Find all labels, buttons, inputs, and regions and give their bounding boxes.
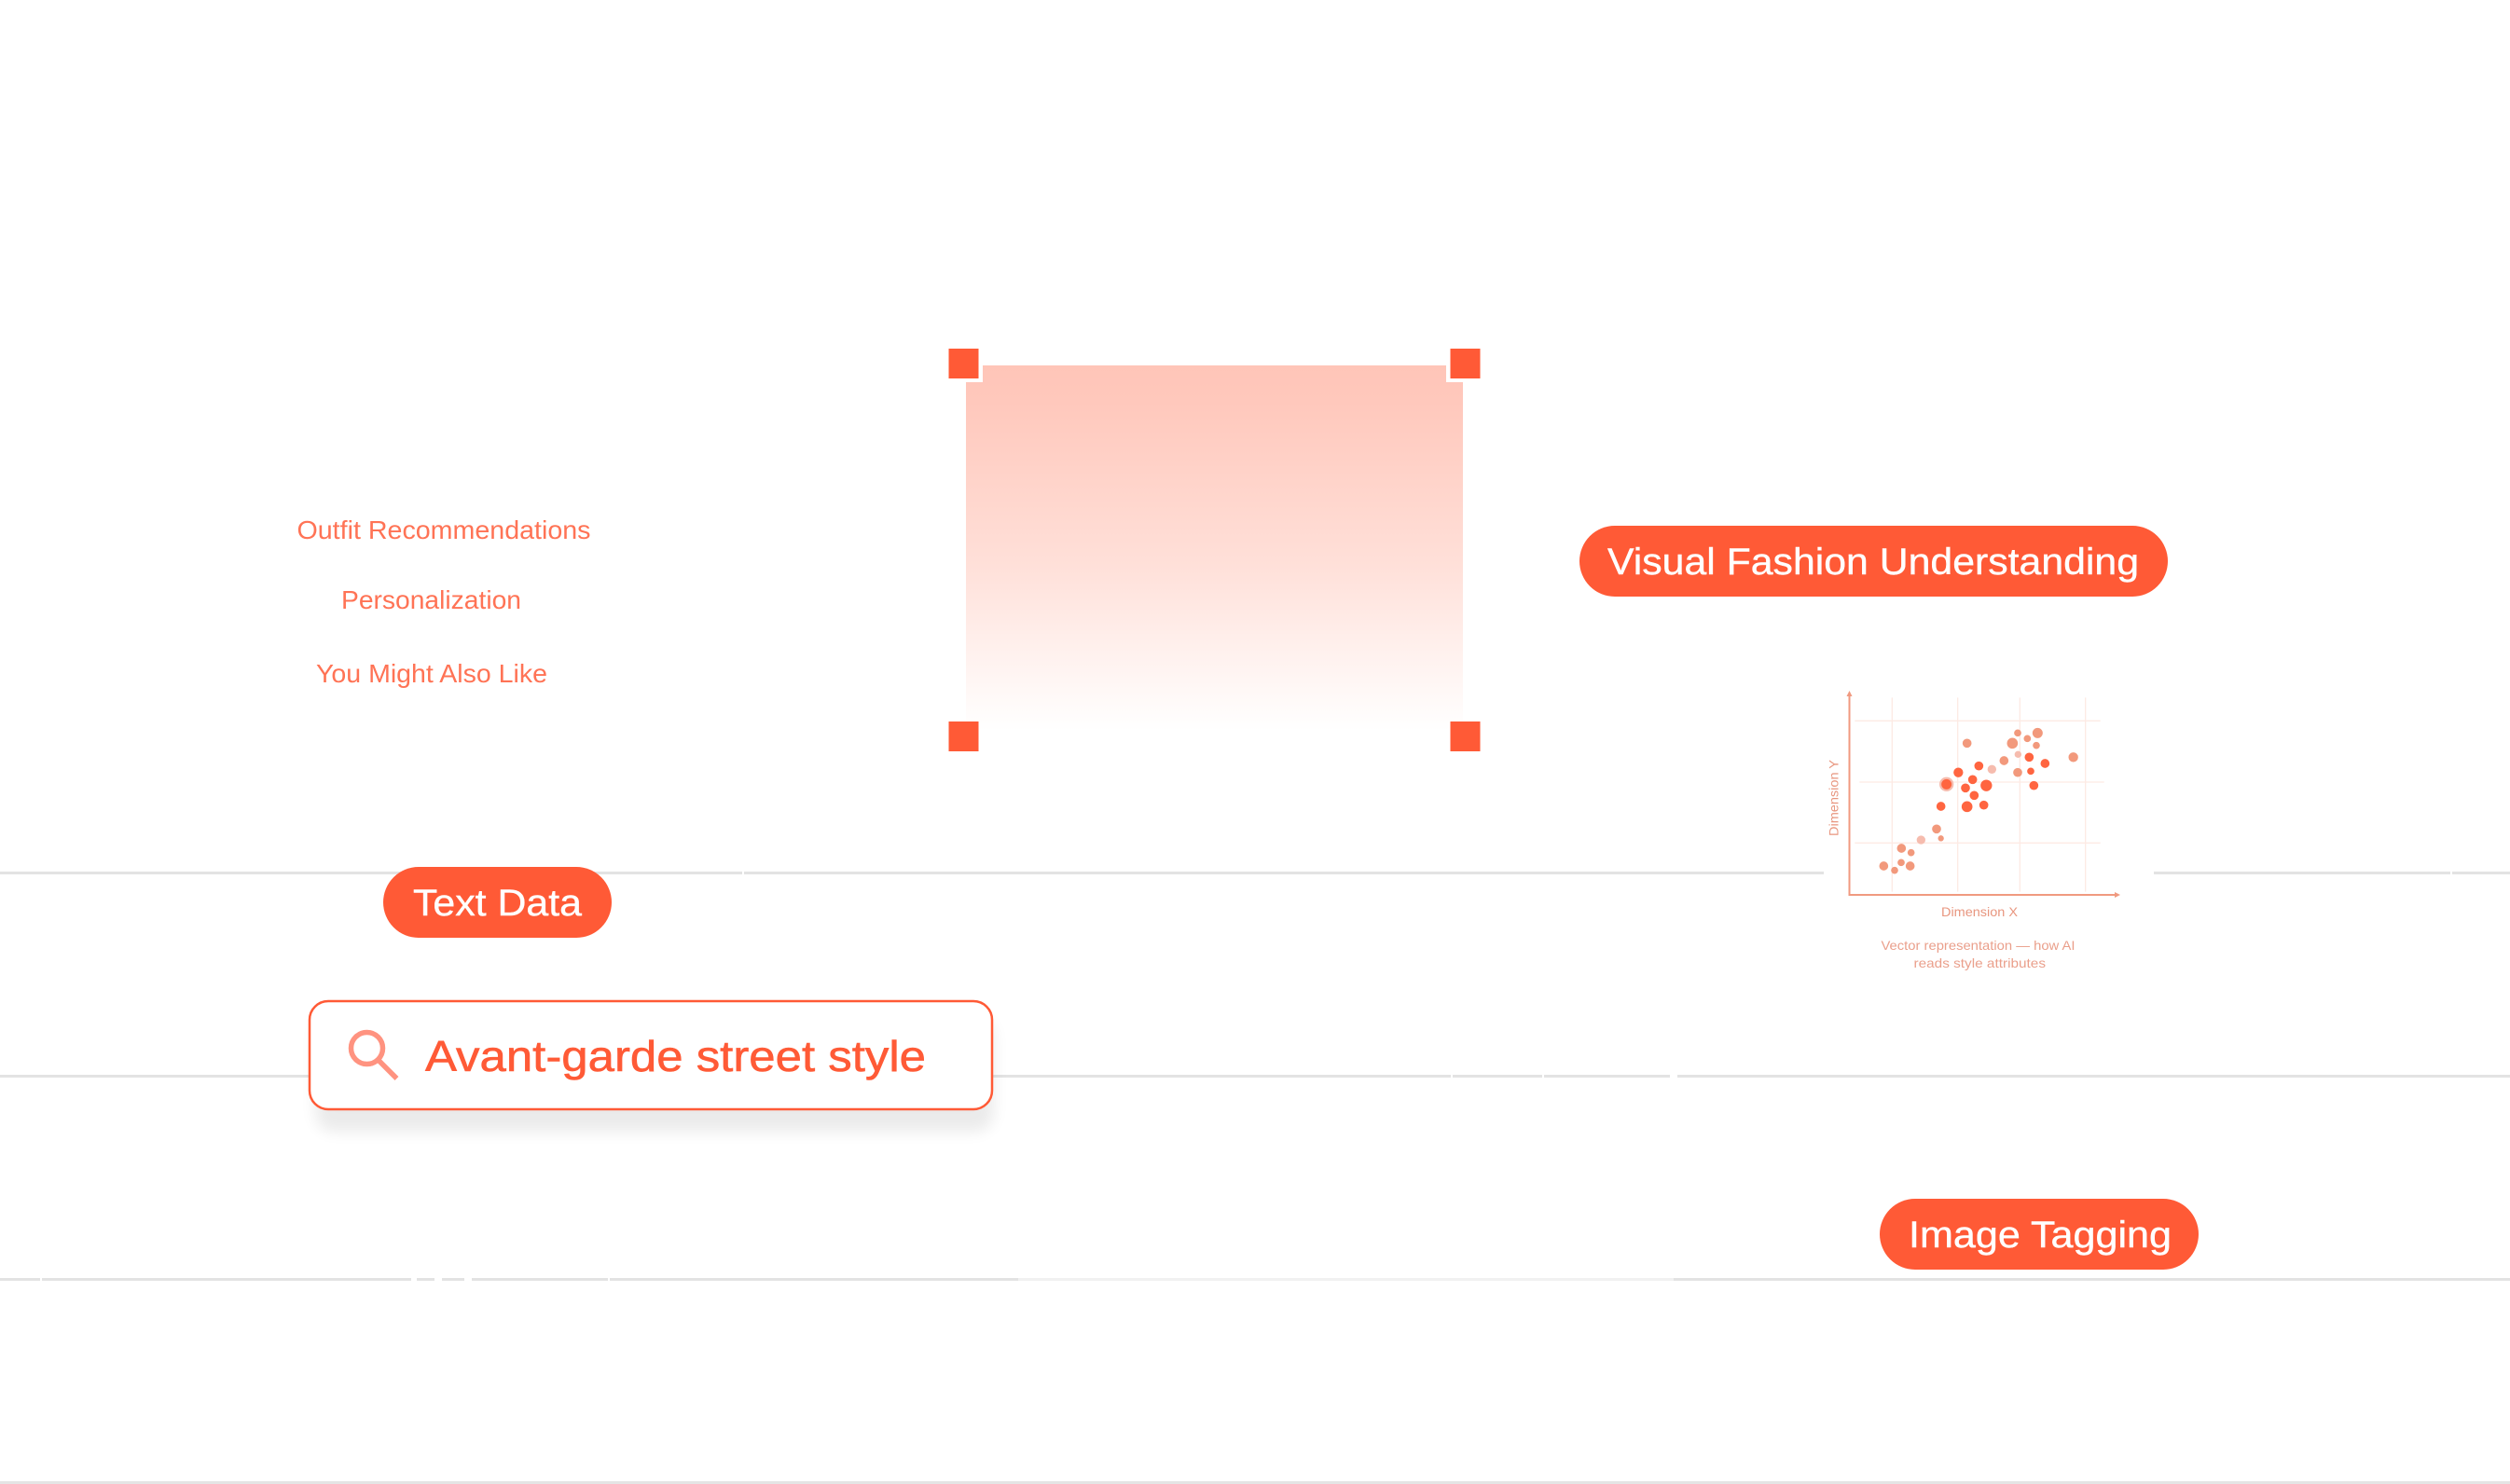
pill: text data: Text Data <box>413 883 583 924</box>
chart caption: reads style attributes <box>1913 955 2046 970</box>
points: strong cluster <box>1937 753 2049 812</box>
search field <box>310 1001 992 1109</box>
pill: image tagging <box>1880 1199 2199 1270</box>
text: personalization: Personalization <box>341 585 521 614</box>
handle: bottom left <box>949 721 979 751</box>
handle: bottom right <box>1451 721 1481 751</box>
text: you might also like: You Might Also Like <box>316 659 547 688</box>
handle: top left <box>949 349 979 378</box>
pill: text data <box>383 867 612 938</box>
pill: visual fashion understanding: Visual Fashion Understanding <box>1607 542 2139 583</box>
icon: magnifying glass <box>351 1033 397 1079</box>
chart caption: Vector representation — how AI <box>1882 938 2076 953</box>
data points <box>1880 728 2077 873</box>
axis label: dimension y: Dimension Y <box>1826 759 1841 836</box>
text: outfit recommendations: Outfit Recommendations <box>297 515 591 544</box>
recommendation text list <box>297 515 591 688</box>
points: light cluster <box>1880 728 2077 873</box>
axes <box>1846 691 2120 898</box>
image placeholder panel with selection handles <box>949 349 1481 751</box>
points: pale highlights <box>1917 751 2021 845</box>
gradient image area <box>966 365 1463 731</box>
vector scatter chart <box>1824 677 2154 984</box>
pill: image tagging: Image Tagging <box>1909 1215 2172 1256</box>
handle: top right <box>1451 349 1481 378</box>
search bar <box>310 1001 994 1132</box>
grid <box>1855 697 2104 892</box>
search query text: Avant-garde street style <box>425 1032 926 1080</box>
axis label: dimension x: Dimension X <box>1941 904 2019 919</box>
pill: visual fashion understanding <box>1579 526 2168 597</box>
chart caption <box>1882 938 2076 970</box>
